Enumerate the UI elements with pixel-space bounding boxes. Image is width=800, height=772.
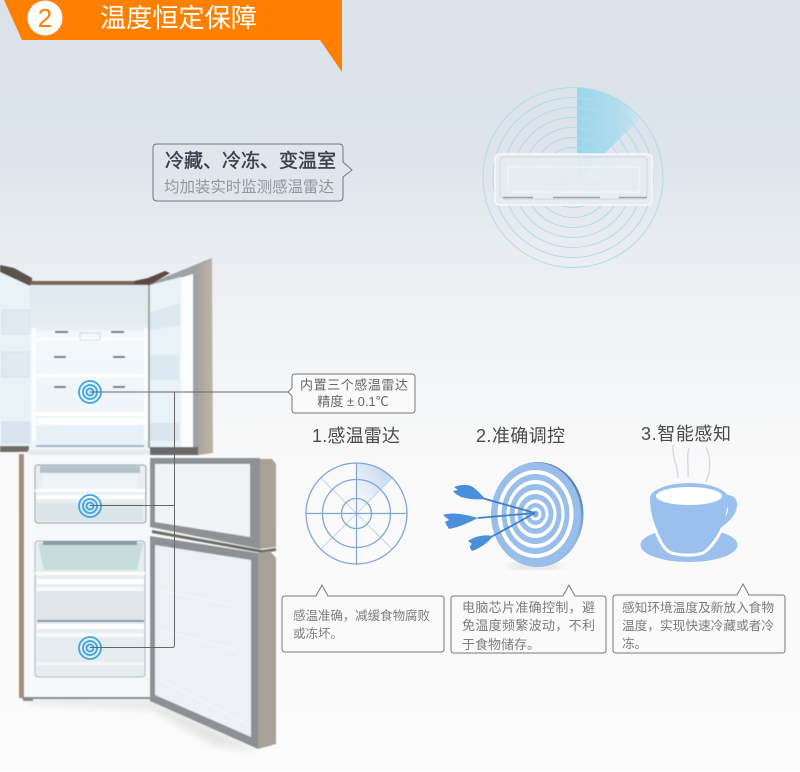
- refrigerator body: [19, 450, 150, 701]
- number badge: [28, 0, 62, 36]
- feature heading 3: 3.智能感知: [641, 424, 731, 444]
- icon: radar: [306, 462, 407, 565]
- upper freezer drawer: [35, 465, 146, 523]
- text box 3: 冻。: [622, 636, 647, 651]
- text box 1: 感温准确，减缓食物腐败: [293, 608, 430, 623]
- darts: [443, 485, 535, 551]
- refrigerator photo: [0, 258, 276, 750]
- callout: three compartments: 冷藏、冷冻、变温室: [165, 150, 336, 172]
- top door right: [134, 258, 213, 455]
- banner ribbon: [4, 0, 342, 72]
- text box 3: 感知环境温度及新放入食物: [622, 600, 774, 615]
- sensor leader lines: [90, 392, 288, 648]
- number badge: 2: [38, 3, 52, 33]
- bottom white strip: [0, 769, 800, 772]
- feature heading 1: 1.感温雷达: [312, 426, 400, 446]
- sensor device: [495, 154, 652, 205]
- text box 3: [613, 584, 785, 653]
- top compartment: [30, 281, 148, 450]
- text box 3: 温度，实现快速冷藏或者冷: [622, 618, 774, 633]
- callout: three compartments: [153, 144, 352, 201]
- middle door: [150, 458, 276, 553]
- icon: coffee cup: [640, 445, 738, 562]
- text box 1: [282, 585, 444, 652]
- radar sensor illustration: [483, 87, 663, 268]
- temperature sensor: convertible compartment: [79, 495, 101, 517]
- callout: three compartments: 均加装实时监测感温雷达: [164, 178, 334, 196]
- callout: built-in sensors: [288, 374, 415, 413]
- text box 2: 电脑芯片准确控制，避: [462, 600, 595, 615]
- temperature sensor: fridge compartment: [79, 381, 101, 403]
- text box 1: 或冻坏。: [293, 626, 343, 641]
- section heading: 温度恒定保障: [100, 3, 257, 33]
- lower freezer drawers: [35, 541, 145, 677]
- temperature sensor: freezer compartment: [79, 637, 101, 659]
- radar wedge: [577, 87, 641, 180]
- callout: built-in sensors: 内置三个感温雷达: [300, 378, 408, 392]
- radar rings: [483, 88, 663, 268]
- top door left: [0, 265, 32, 452]
- floor shadow: [28, 698, 258, 750]
- callout: built-in sensors: 精度 ± 0.1℃: [317, 394, 389, 409]
- sensor device: multi flow: [545, 176, 601, 188]
- steam: [673, 445, 710, 482]
- feature heading 2: 2.准确调控: [476, 426, 565, 446]
- header banner: [4, 0, 342, 72]
- text box 2: [451, 585, 606, 653]
- text box 2: 于食物储存。: [462, 637, 540, 652]
- text box 2: 免温度频繁波动，不利: [462, 618, 595, 633]
- icon: dartboard: [443, 462, 584, 569]
- lower door: [150, 536, 276, 749]
